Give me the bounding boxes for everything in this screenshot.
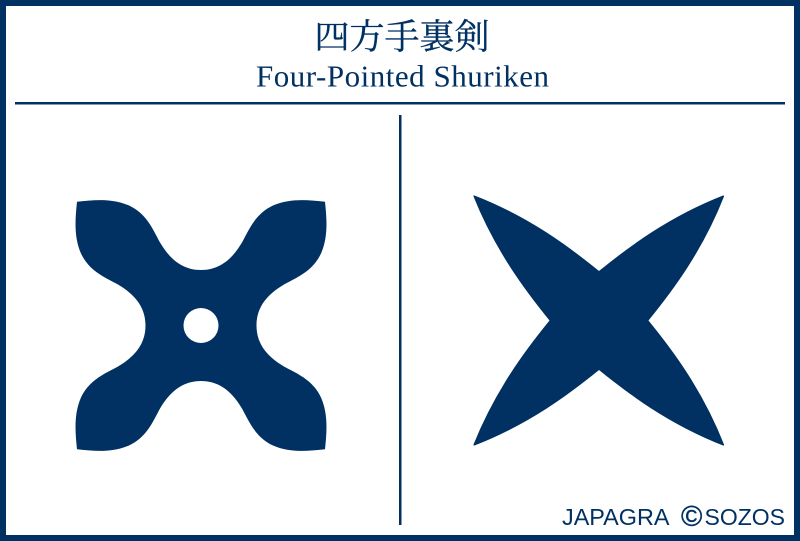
credit: JAPAGRA (562, 504, 670, 530)
subtitle: English: Four-Pointed Shuriken (256, 58, 550, 94)
credit: SOZOS (704, 504, 785, 530)
title: Japanese: 四方手裏剣 (314, 18, 490, 57)
icon: four-pointed star shuriken (474, 196, 723, 445)
icon: four-pointed shuriken with center hole (76, 200, 326, 451)
credit (562, 501, 785, 533)
credit: © (681, 501, 702, 533)
center divider (399, 115, 402, 525)
header rule (15, 102, 785, 104)
